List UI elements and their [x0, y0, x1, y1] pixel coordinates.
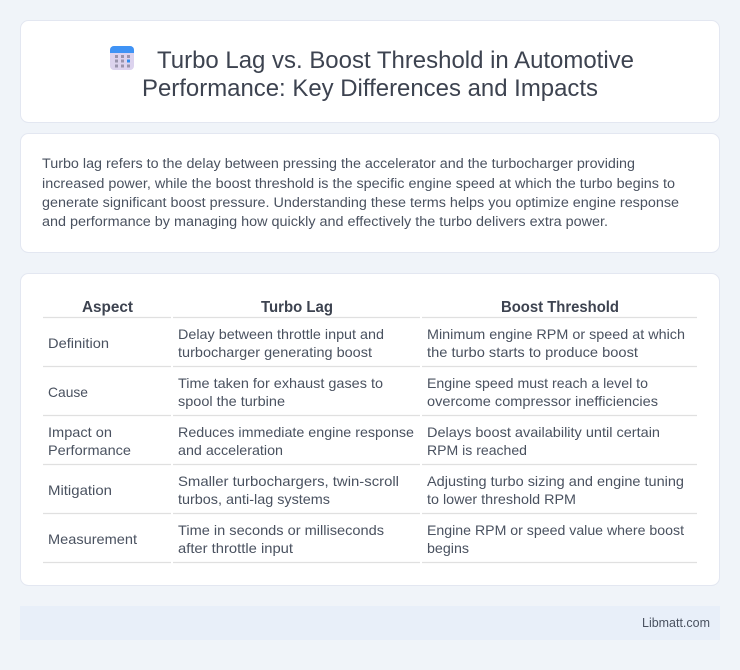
- row: mitigation: [48, 473, 684, 507]
- row: definition: Minimum engine RPM or speed at which: [427, 326, 685, 342]
- row: mitigation: turbos, anti-lag systems: [178, 491, 330, 507]
- table header: Aspect: [82, 299, 133, 316]
- row: impact on performance: [48, 424, 660, 458]
- row: impact on performance: Reduces immediate engine response: [178, 424, 414, 440]
- row: impact on performance: Performance: [48, 442, 131, 458]
- row: measurement: Measurement: [48, 531, 137, 547]
- table header: [82, 299, 619, 316]
- icon: calendar: [110, 46, 134, 70]
- panel: intro text: generate significant boost pressure. Understanding these terms helps you optimize engine response: [42, 195, 679, 211]
- row: impact on performance: Delays boost availability until certain: [427, 424, 660, 440]
- row: definition: the turbo starts to produce boost: [427, 344, 638, 360]
- row: cause: overcome compressor inefficiencies: [427, 393, 658, 409]
- table header: Boost Threshold: [501, 299, 619, 316]
- row: measurement: [48, 522, 684, 556]
- panel: intro text: and performance by managing how quickly and effectively the turbo delivers extra power.: [42, 214, 608, 230]
- row: mitigation: Smaller turbochargers, twin-scroll: [178, 473, 399, 489]
- panel: intro text: [20, 134, 720, 252]
- row: cause: [48, 375, 658, 409]
- row: cause: spool the turbine: [178, 393, 285, 409]
- row: impact on performance: and acceleration: [178, 442, 283, 458]
- row: definition: Delay between throttle input and: [178, 326, 384, 342]
- row: measurement: Engine RPM or speed value where boost: [427, 522, 684, 538]
- footer: Libmatt.com: [642, 616, 710, 630]
- row: measurement: Time in seconds or milliseconds: [178, 522, 384, 538]
- title: Performance: Key Differences and Impacts: [142, 75, 598, 102]
- row: cause: Time taken for exhaust gases to: [178, 375, 383, 391]
- row: cause: Engine speed must reach a level to: [427, 375, 648, 391]
- row: cause: Cause: [48, 384, 88, 400]
- panel: title card: [20, 20, 720, 122]
- row: definition: turbocharger generating boost: [178, 344, 372, 360]
- table header: Turbo Lag: [261, 299, 333, 316]
- row: mitigation: Adjusting turbo sizing and engine tuning: [427, 473, 684, 489]
- row: impact on performance: Impact on: [48, 424, 112, 440]
- title: Turbo Lag vs. Boost Threshold in Automotive: [157, 47, 634, 74]
- row: definition: Definition: [48, 335, 109, 351]
- row: measurement: begins: [427, 540, 469, 556]
- panel: comparison table: [20, 274, 720, 586]
- row: mitigation: Mitigation: [48, 482, 112, 498]
- title: [142, 47, 634, 102]
- row: mitigation: to lower threshold RPM: [427, 491, 576, 507]
- row: impact on performance: RPM is reached: [427, 442, 527, 458]
- panel: intro text: Turbo lag refers to the delay between pressing the accelerator and the turbocharger providing: [42, 156, 635, 172]
- row: measurement: after throttle input: [178, 540, 293, 556]
- row: definition: [48, 326, 685, 360]
- panel: intro text: increased power, while the boost threshold is the specific engine speed at which the turbo begins to: [42, 176, 675, 192]
- footer: [20, 606, 720, 640]
